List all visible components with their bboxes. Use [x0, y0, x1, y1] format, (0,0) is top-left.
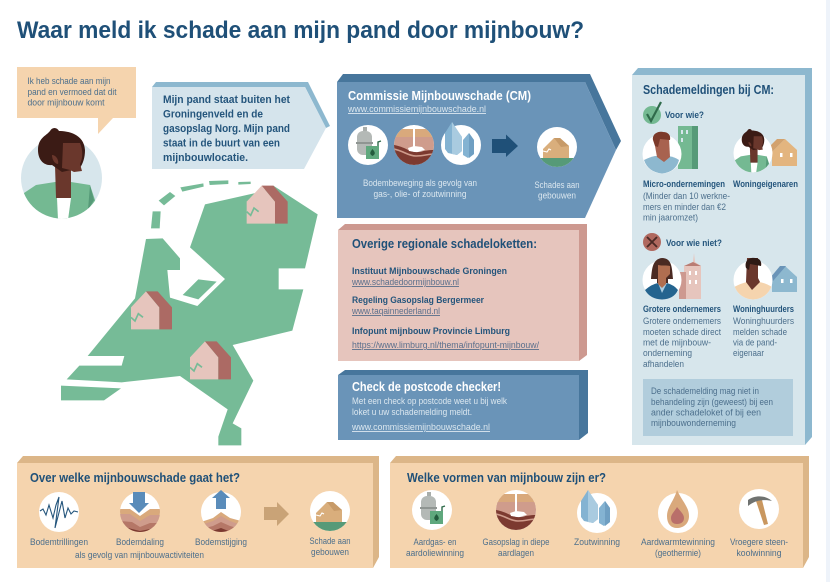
panel: welke vormen van mijnbouw: Welke vormen van mijnbouw zijn er?: [407, 470, 606, 485]
panel: overige regionale schadeloketten: Instituut Mijnbouwschade Groningen: [352, 266, 507, 276]
callout: location question: [152, 82, 330, 169]
map of the Netherlands: [61, 180, 318, 445]
panel: welke vormen van mijnbouw: koolwinning: [736, 548, 782, 558]
panel: overige regionale schadeloketten: www.taqainnederland.nl: [351, 306, 440, 316]
panel: over welke mijnbouwschade: Over welke mijnbouwschade gaat het?: [30, 470, 240, 485]
panel: Commissie Mijnbouwschade: gas-, olie- of zoutwinning: [374, 189, 467, 199]
icon: subsidence: [120, 492, 160, 534]
icon: pickaxe: [739, 489, 779, 529]
icon: large company: [642, 253, 701, 300]
callout: location question: Mijn pand staat buiten het: [163, 94, 290, 106]
panel: postcode checker: www.commissiemijnbouwschade.nl: [351, 422, 490, 432]
speech bubble: [17, 67, 136, 134]
panel: schademeldingen bij CM: mers en minder dan €2: [643, 202, 726, 212]
panel: schademeldingen bij CM: Voor wie niet?: [666, 238, 722, 248]
panel: welke vormen van mijnbouw: Aardwarmtewinning: [641, 537, 715, 547]
icon: damaged building: [537, 127, 577, 168]
panel: welke vormen van mijnbouw: aardlagen: [498, 548, 534, 558]
speech bubble: Ik heb schade aan mijn: [28, 76, 111, 86]
note box: mijnbouwonderneming: [651, 418, 736, 428]
panel: schademeldingen bij CM: Voor wie?: [665, 110, 704, 120]
callout: location question: gasopslag Norg. Mijn pand: [163, 123, 290, 135]
panel: welke vormen van mijnbouw: Vroegere steen-: [730, 537, 788, 547]
note box: [643, 379, 793, 436]
panel: welke vormen van mijnbouw: Zoutwinning: [574, 537, 620, 547]
icon: damaged building: [310, 491, 350, 532]
panel: schademeldingen bij CM: (Minder dan 10 werkne-: [643, 191, 730, 201]
icon: soil layers: [394, 125, 434, 167]
panel: schademeldingen bij CM: Schademeldingen bij CM:: [643, 83, 774, 97]
panel: postcode checker: Check de postcode checker!: [352, 380, 501, 394]
note box: behandeling zijn (geweest) bij een: [651, 397, 773, 407]
panel: overige regionale schadeloketten: www.schadedoormijnbouw.nl: [351, 277, 459, 287]
panel: overige regionale schadeloketten: Infopunt mijnbouw Provincie Limburg: [352, 326, 510, 336]
panel: Commissie Mijnbouwschade: Schades aan: [534, 180, 580, 190]
icon: cross: [643, 233, 661, 251]
panel: overige regionale schadeloketten: https://www.limburg.nl/thema/infopunt-mijnbouw/: [352, 340, 539, 350]
panel: schademeldingen bij CM: eigenaar: [733, 348, 764, 358]
panel: welke vormen van mijnbouw: Aardgas- en: [414, 537, 457, 547]
icon: micro-entrepreneur: [642, 126, 698, 174]
icon: check mark: [643, 102, 661, 124]
panel: schademeldingen bij CM: [632, 68, 812, 445]
speech bubble: pand en vermoed dat dit: [28, 87, 117, 97]
panel: schademeldingen bij CM: min jaaromzet): [643, 212, 698, 222]
panel: over welke mijnbouwschade: als gevolg van mijnbouwactiviteiten: [75, 550, 204, 560]
panel: schademeldingen bij CM: Woningeigenaren: [733, 179, 798, 189]
icon: gas storage layers: [496, 490, 536, 532]
panel: schademeldingen bij CM: Woninghuurders: [733, 304, 794, 314]
speech bubble: door mijnbouw komt: [28, 98, 105, 108]
icon: geothermal drop: [658, 490, 698, 533]
panel: Commissie Mijnbouwschade: Bodembeweging als gevolg van: [363, 178, 477, 188]
panel: Commissie Mijnbouwschade: Commissie Mijnbouwschade (CM): [348, 89, 531, 103]
panel: over welke mijnbouwschade: Bodemdaling: [116, 537, 164, 547]
icon: tenant: [734, 258, 797, 300]
panel: overige regionale schadeloketten: Regeling Gasopslag Bergermeer: [352, 295, 484, 305]
panel: Commissie Mijnbouwschade: www.commissiemijnbouwschade.nl: [347, 104, 486, 114]
icon: salt crystals: [577, 490, 617, 533]
note box: ander schadeloket of bij een: [651, 408, 761, 418]
arrow: [492, 134, 518, 157]
panel: schademeldingen bij CM: onderneming: [643, 348, 692, 358]
icon: salt crystals: [441, 122, 481, 165]
panel: over welke mijnbouwschade: [17, 456, 379, 568]
panel: schademeldingen bij CM: Micro-ondernemingen: [643, 179, 725, 189]
panel: welke vormen van mijnbouw: [390, 456, 809, 568]
icon: gas and oil: [412, 490, 452, 530]
panel: schademeldingen bij CM: Grotere ondernemers: [643, 304, 721, 314]
panel: schademeldingen bij CM: met de mijnbouw-: [643, 338, 711, 348]
icon: home owner: [734, 129, 797, 173]
icon: vibrations: [39, 492, 79, 532]
panel: postcode checker: [338, 370, 588, 440]
title: Waar meld ik schade aan mijn pand door mijnbouw?: [17, 17, 584, 44]
panel: schademeldingen bij CM: Woninghuurders: [733, 316, 795, 326]
panel: Commissie Mijnbouwschade: gebouwen: [538, 190, 576, 200]
panel: postcode checker: Met een check op postcode weet u bij welk: [352, 396, 508, 406]
panel: schademeldingen bij CM: via de pand-: [733, 338, 777, 348]
panel: over welke mijnbouwschade: Schade aan: [310, 536, 351, 546]
icon: uplift: [201, 490, 241, 534]
panel: postcode checker: loket u uw schademelding meldt.: [352, 407, 472, 417]
panel: schademeldingen bij CM: afhandelen: [643, 359, 684, 369]
panel: welke vormen van mijnbouw: Gasopslag in diepe: [482, 537, 550, 547]
panel: schademeldingen bij CM: moeten schade direct: [643, 327, 722, 337]
panel: over welke mijnbouwschade: Bodemstijging: [195, 537, 247, 547]
arrow: [264, 502, 289, 526]
callout: location question: staat in de buurt van een: [163, 138, 280, 150]
panel: schademeldingen bij CM: Grotere ondernemers: [643, 316, 722, 326]
panel: schademeldingen bij CM: melden schade: [733, 327, 787, 337]
panel: welke vormen van mijnbouw: aardoliewinning: [406, 548, 464, 558]
panel: welke vormen van mijnbouw: (geothermie): [655, 548, 701, 558]
panel: overige regionale schadeloketten: [338, 224, 587, 361]
panel: overige regionale schadeloketten: Overige regionale schadeloketten:: [352, 237, 537, 251]
callout: location question: mijnbouwlocatie.: [163, 152, 248, 164]
panel: Commissie Mijnbouwschade: [337, 74, 621, 218]
icon: woman with damage report: [21, 128, 102, 220]
panel: over welke mijnbouwschade: Bodemtrillingen: [30, 537, 88, 547]
icon: gas and oil: [348, 125, 388, 165]
note box: De schademelding mag niet in: [651, 386, 759, 396]
callout: location question: Groningenveld en de: [163, 108, 263, 120]
panel: over welke mijnbouwschade: gebouwen: [311, 547, 349, 557]
page background strip: [826, 0, 830, 582]
